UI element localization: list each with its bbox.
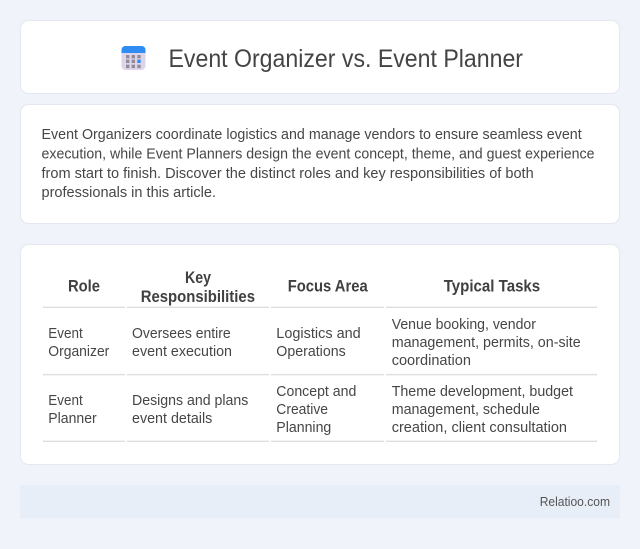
icon: calendar — [122, 46, 146, 70]
table header row: Key — [185, 269, 211, 287]
table row: event planner: Theme development, budget — [392, 384, 573, 400]
table row: event organizer: coordination — [392, 353, 471, 369]
table row: event planner: event details — [132, 411, 212, 427]
title: Event Organizer vs. Event Planner — [168, 46, 523, 73]
table row: event planner: Planning — [276, 420, 331, 436]
intro text: professionals in this article. — [42, 184, 216, 201]
table row: event planner: management, schedule — [392, 402, 540, 418]
table row: event planner: Planner — [48, 411, 97, 427]
table row: event organizer: event execution — [132, 344, 232, 360]
panel: title header — [20, 20, 620, 94]
table row: event planner: Creative — [276, 402, 328, 418]
intro text — [42, 126, 594, 201]
table row: event planner: Concept and — [276, 384, 356, 400]
panel: introduction — [20, 104, 620, 224]
footer — [20, 485, 620, 519]
intro text: Event Organizers coordinate logistics and manage vendors to ensure seamless event — [42, 126, 582, 143]
table row: event organizer: Operations — [276, 344, 346, 360]
table header row: Focus Area — [288, 278, 369, 296]
table row: event organizer — [48, 317, 581, 369]
intro text: execution, while Event Planners design the event concept, theme, and guest experience — [42, 146, 594, 163]
table row: event organizer: management, permits, on-site — [392, 335, 581, 351]
table row: event planner: Designs and plans — [132, 393, 248, 409]
table row: event planner — [48, 384, 573, 436]
footer credit: Relatioo.com — [540, 495, 610, 509]
table header row: Responsibilities — [141, 288, 255, 306]
table row: event organizer: Venue booking, vendor — [392, 317, 536, 333]
intro text: from start to finish. Discover the distinct roles and key responsibilities of both — [42, 165, 534, 182]
table row: event planner: Event — [48, 393, 83, 409]
table header row: Typical Tasks — [444, 278, 540, 296]
table header row: Role — [68, 278, 100, 296]
table row: event organizer: Oversees entire — [132, 326, 231, 342]
panel: comparison table — [20, 244, 620, 464]
table row: event organizer: Logistics and — [276, 326, 361, 342]
table header row — [68, 269, 540, 306]
table row: event organizer: Event — [48, 326, 83, 342]
table row: event organizer: Organizer — [48, 344, 109, 360]
table row: event planner: creation, client consultation — [392, 420, 567, 436]
